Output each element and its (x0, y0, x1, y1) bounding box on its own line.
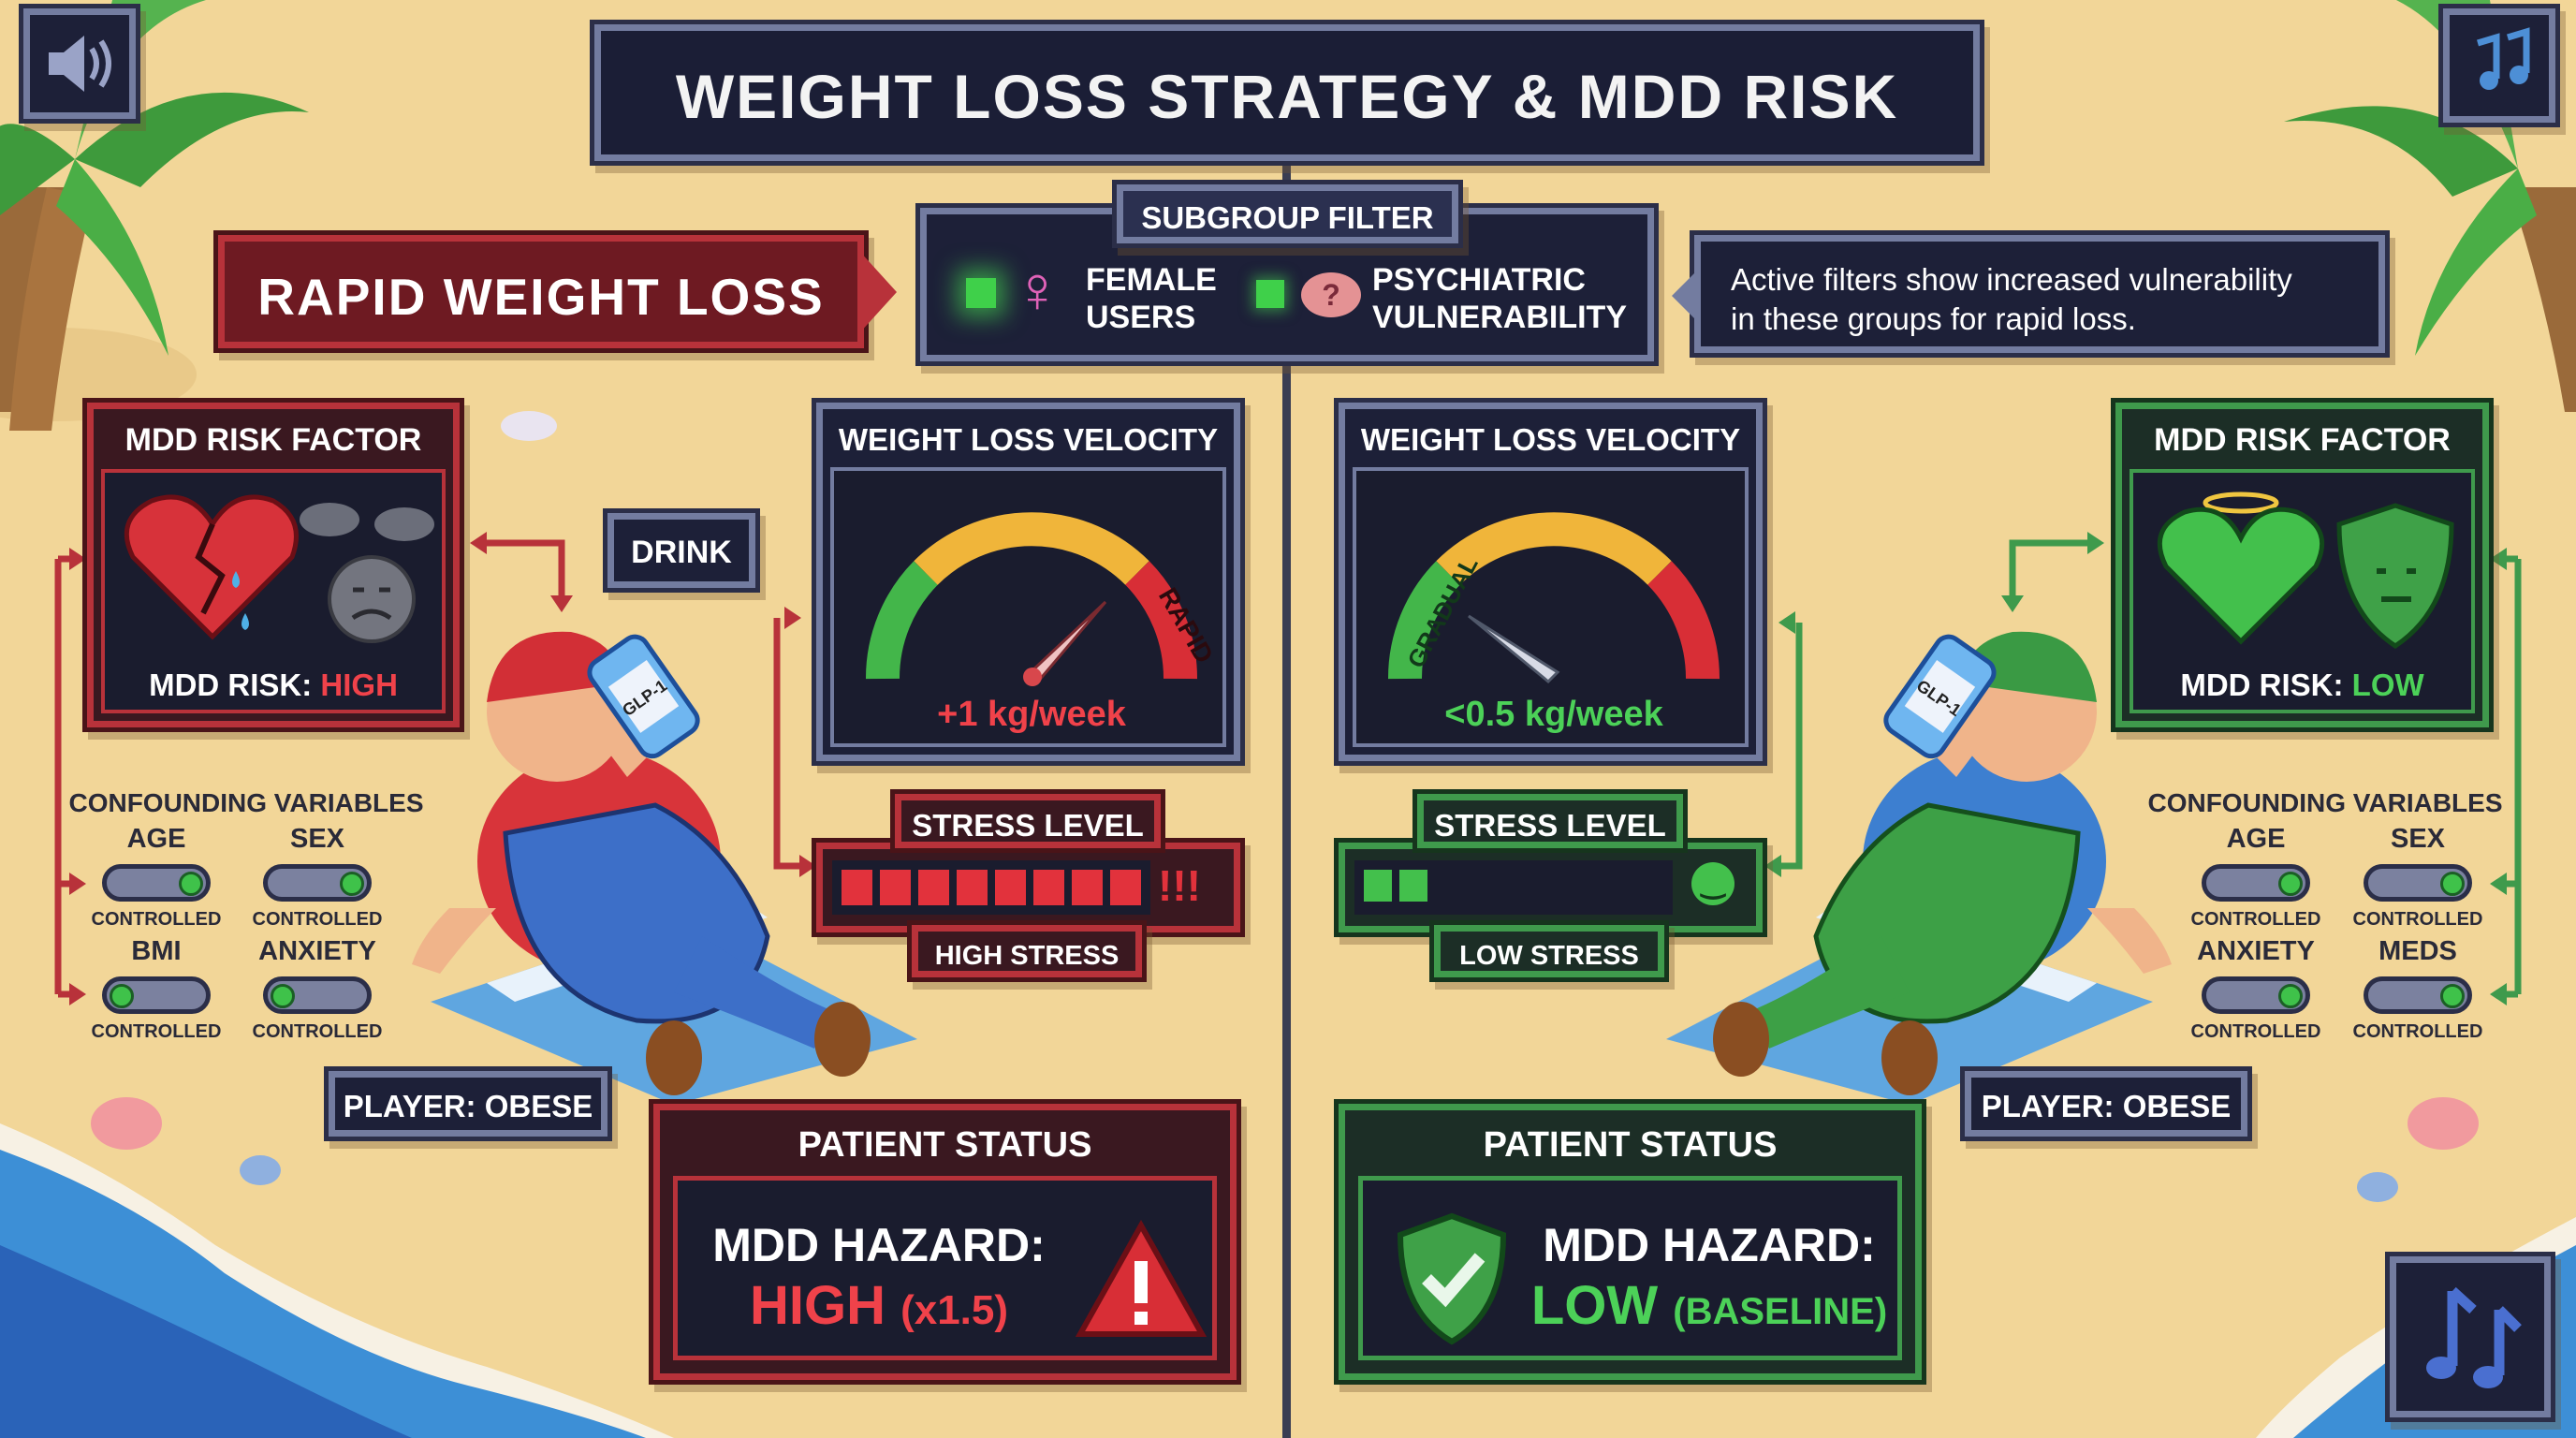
text: hazard low: MDD HAZARD: (1543, 1219, 1876, 1271)
bar: high stress: !!! (1158, 861, 1201, 910)
confounding variables right: SEX (2391, 824, 2445, 854)
panel: right MDD risk factor: MDD RISK FACTOR (2154, 422, 2451, 458)
confounding variables left: CONTROLLED (92, 909, 221, 930)
panel: right velocity gauge: <0.5 kg/week (1444, 695, 1664, 734)
red arrows (58, 543, 805, 994)
tab: subgroup filter (1117, 184, 1458, 243)
arrow: banner pointer (864, 257, 897, 328)
panel: right patient status (1339, 1104, 1922, 1380)
panel: right velocity gauge (1339, 403, 1763, 761)
seashells (91, 1097, 162, 1150)
confounding variables left: AGE (127, 824, 185, 854)
character: right player (1666, 631, 2172, 1099)
text: psychiatric vulnerability (1372, 262, 1627, 335)
tab: stress level (1417, 794, 1683, 848)
confounding variables right: MEDS (2378, 936, 2457, 966)
bar: low stress: ‿ (1702, 868, 1724, 899)
character: left player: GLP-1 (619, 676, 670, 720)
text: hazard high: MDD HAZARD: (712, 1219, 1046, 1271)
text: female users: USERS (1086, 300, 1195, 335)
confounding variables right: CONTROLLED (2191, 909, 2320, 930)
tab: stress level (895, 794, 1161, 848)
panel: left patient status: HIGH (x1.5) (750, 1275, 1008, 1336)
panel: right velocity gauge: GRADUAL (1401, 551, 1484, 672)
speech bubble: drink (607, 513, 755, 588)
text: MDD risk high: MDD RISK: HIGH (149, 668, 398, 702)
confounding variables left: CONFOUNDING VARIABLES (68, 788, 424, 817)
callout: active filters: Active filters show increased vulnerability (1731, 262, 2292, 297)
confounding variables left (68, 788, 424, 1042)
ocean left (0, 1123, 674, 1438)
icon: female symbol: ♀ (1013, 253, 1061, 326)
text: MDD risk low: MDD RISK: LOW (2180, 668, 2424, 702)
confounding variables left: CONTROLLED (253, 1021, 382, 1042)
confounding variables right (2147, 788, 2503, 1042)
tab: low stress: LOW STRESS (1459, 941, 1639, 971)
icon: heart with halo and shield (2157, 492, 2454, 649)
icon: check shield (1398, 1213, 1506, 1344)
panel: right velocity gauge: WEIGHT LOSS VELOCITY (1361, 422, 1740, 457)
tab: high stress: HIGH STRESS (935, 941, 1119, 971)
text: female users: FEMALE (1086, 262, 1217, 298)
panel: left MDD risk factor: MDD RISK FACTOR (125, 422, 421, 458)
panel: right stress level (1334, 789, 1773, 990)
label: player obese right: PLAYER: OBESE (1982, 1089, 2231, 1123)
label: player obese left: PLAYER: OBESE (344, 1089, 593, 1123)
palm left (0, 0, 309, 431)
panel: left stress level (812, 789, 1251, 990)
ocean right (2256, 1217, 2576, 1438)
text: psychiatric vulnerability: VULNERABILITY (1372, 300, 1627, 335)
panel: left velocity gauge: RAPID (1153, 583, 1219, 668)
panel: left MDD risk factor (87, 403, 460, 727)
panel: subgroup filter (920, 208, 1654, 361)
icon: warning triangle (1076, 1220, 1207, 1337)
title (594, 24, 1980, 161)
tab: stress level: STRESS LEVEL (1434, 808, 1666, 843)
icon: broken heart and storm face (124, 494, 434, 643)
confounding variables left: ANXIETY (258, 936, 376, 966)
callout: active filters (1694, 235, 2385, 353)
confounding variables right: CONTROLLED (2191, 1021, 2320, 1042)
tab: high stress (912, 925, 1142, 977)
green arrows (1774, 543, 2518, 994)
icon: speaker (23, 8, 136, 119)
tab: subgroup filter: SUBGROUP FILTER (1141, 200, 1434, 235)
bar: high stress (816, 843, 1240, 932)
callout: active filters: in these groups for rapid loss. (1731, 301, 2136, 336)
confounding variables left: CONTROLLED (253, 909, 382, 930)
text: psychiatric vulnerability: PSYCHIATRIC (1372, 262, 1586, 298)
label: player obese left (329, 1071, 607, 1137)
tab: low stress (1434, 925, 1664, 977)
icon: music bottom right (2390, 1256, 2551, 1417)
confounding variables left: BMI (131, 936, 182, 966)
speech bubble: drink: DRINK (631, 535, 732, 570)
title: WEIGHT LOSS STRATEGY & MDD RISK (676, 62, 1898, 131)
confounding variables right: CONTROLLED (2353, 1021, 2482, 1042)
panel: left velocity gauge: +1 kg/week (937, 695, 1127, 734)
panel: right patient status: LOW (BASELINE) (1531, 1275, 1887, 1336)
character: right player: GLP-1 (1913, 676, 1965, 720)
icon: brain (1301, 272, 1361, 317)
panel: left patient status (653, 1104, 1237, 1380)
arrow: callout pointer (1672, 273, 1694, 318)
panel: left velocity gauge (816, 403, 1240, 761)
banner: rapid weight loss: RAPID WEIGHT LOSS (257, 268, 825, 326)
confounding variables right: ANXIETY (2197, 936, 2315, 966)
confounding variables right: CONTROLLED (2353, 909, 2482, 930)
confounding variables right: AGE (2227, 824, 2285, 854)
panel: right MDD risk factor (2115, 403, 2489, 727)
panel: left velocity gauge: WEIGHT LOSS VELOCITY (839, 422, 1218, 457)
banner: rapid weight loss (218, 235, 864, 348)
confounding variables left: CONTROLLED (92, 1021, 221, 1042)
label: player obese right (1965, 1071, 2247, 1137)
icon: green indicator 2 (1256, 280, 1284, 308)
panel: right patient status: PATIENT STATUS (1484, 1125, 1777, 1165)
character: left player (412, 631, 917, 1099)
confounding variables right: CONFOUNDING VARIABLES (2147, 788, 2503, 817)
tab: stress level: STRESS LEVEL (912, 808, 1144, 843)
bar: low stress (1339, 843, 1763, 932)
icon: music top right (2443, 8, 2555, 123)
palm right (2284, 0, 2576, 412)
center divider (1282, 161, 1291, 1438)
text: female users (1086, 262, 1217, 335)
confounding variables left: SEX (290, 824, 344, 854)
panel: left patient status: PATIENT STATUS (798, 1125, 1091, 1165)
icon: brain: ? (1322, 278, 1340, 312)
icon: green indicator (966, 278, 996, 308)
